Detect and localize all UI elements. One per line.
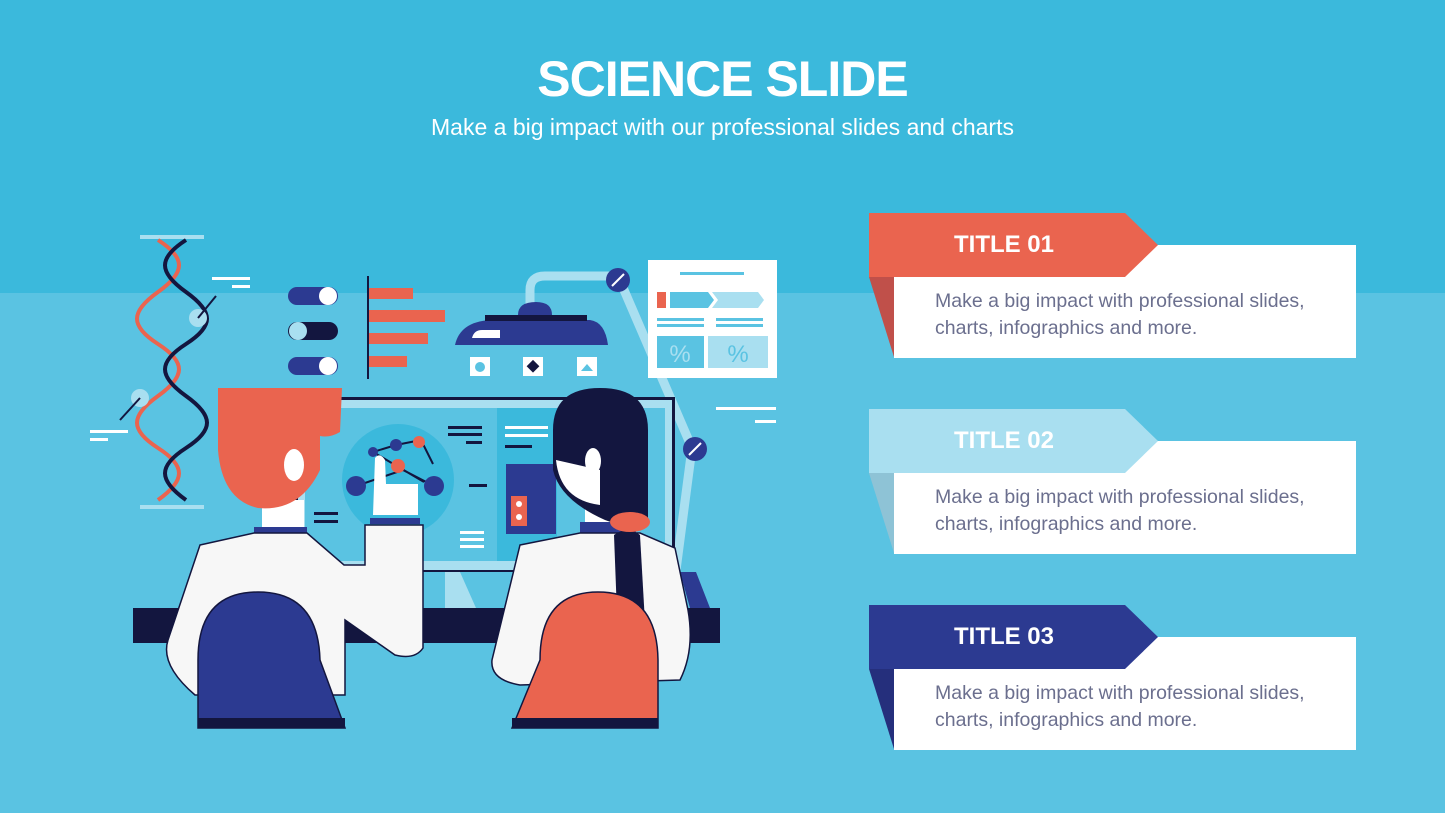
card 03 text: charts, infographics and more. [935, 709, 1197, 731]
card 03 text [935, 682, 1305, 731]
report card [648, 260, 777, 423]
card 01 [869, 213, 1356, 358]
card 01 title: TITLE 01 [954, 231, 1054, 258]
card 02 text: charts, infographics and more. [935, 513, 1197, 535]
card 01 text: Make a big impact with professional slides, [935, 290, 1305, 312]
lamp and arm [455, 268, 707, 570]
card 01 text: charts, infographics and more. [935, 317, 1197, 339]
scientist: man [167, 388, 423, 728]
card 02 text [935, 486, 1305, 535]
report card: % [727, 341, 749, 368]
card 03 title: TITLE 03 [954, 623, 1054, 650]
card 03 [869, 605, 1356, 750]
scientist: woman [492, 388, 690, 728]
illustration: scientists at computer [90, 235, 777, 729]
report card: % [669, 341, 691, 368]
card 03 text: Make a big impact with professional slides, [935, 682, 1305, 704]
icon: DNA helix [90, 235, 250, 509]
desk [133, 608, 720, 643]
monitor [295, 397, 710, 608]
card 01 text [935, 290, 1305, 339]
subtitle: Make a big impact with our professional slides and charts [431, 114, 1014, 140]
card 02 [869, 409, 1356, 554]
card 02 title: TITLE 02 [954, 427, 1054, 454]
title: SCIENCE SLIDE [537, 51, 908, 107]
card 02 text: Make a big impact with professional slides, [935, 486, 1305, 508]
toggles and bar chart [288, 276, 445, 379]
